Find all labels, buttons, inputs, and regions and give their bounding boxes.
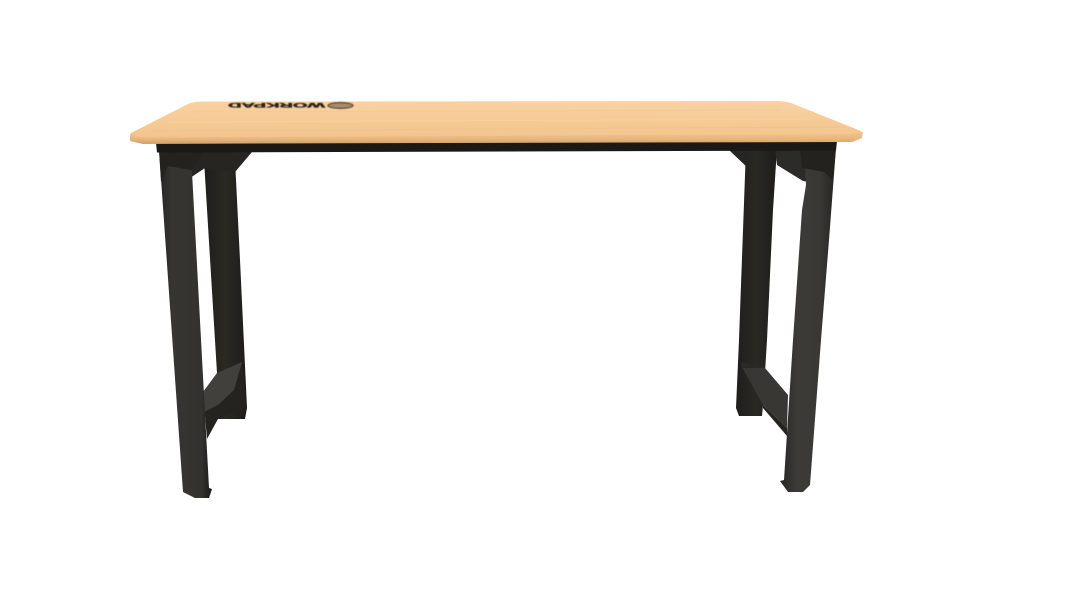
- right inner brace: [729, 150, 750, 170]
- logo badge: [328, 103, 353, 108]
- crossbar shadow face: [203, 362, 246, 439]
- right lower crossbar: [741, 362, 788, 436]
- crossbar light face: [742, 367, 788, 428]
- front edge: [130, 132, 863, 144]
- left front leg: [159, 150, 212, 498]
- wooden table top: [130, 101, 863, 144]
- left top brace: [160, 150, 252, 178]
- right front leg cap: [800, 148, 836, 180]
- crossbar light face: [203, 362, 242, 412]
- right front leg: [780, 148, 836, 492]
- left rear leg: [204, 160, 247, 419]
- apron under the top: [156, 141, 837, 152]
- right rear leg: [736, 148, 777, 416]
- wood grain streaks: [150, 110, 845, 131]
- crossbar shadow strip: [763, 405, 787, 436]
- top surface: [131, 101, 862, 138]
- right leg assembly: [729, 148, 836, 492]
- left lower crossbar: [203, 362, 246, 439]
- left front leg cap: [159, 150, 205, 182]
- left leg assembly: [159, 150, 252, 498]
- logo on top: [228, 102, 353, 109]
- crossbar top face: [741, 362, 765, 368]
- logo wordmark: WORKPAD: [228, 102, 325, 109]
- right outer brace: [775, 148, 835, 185]
